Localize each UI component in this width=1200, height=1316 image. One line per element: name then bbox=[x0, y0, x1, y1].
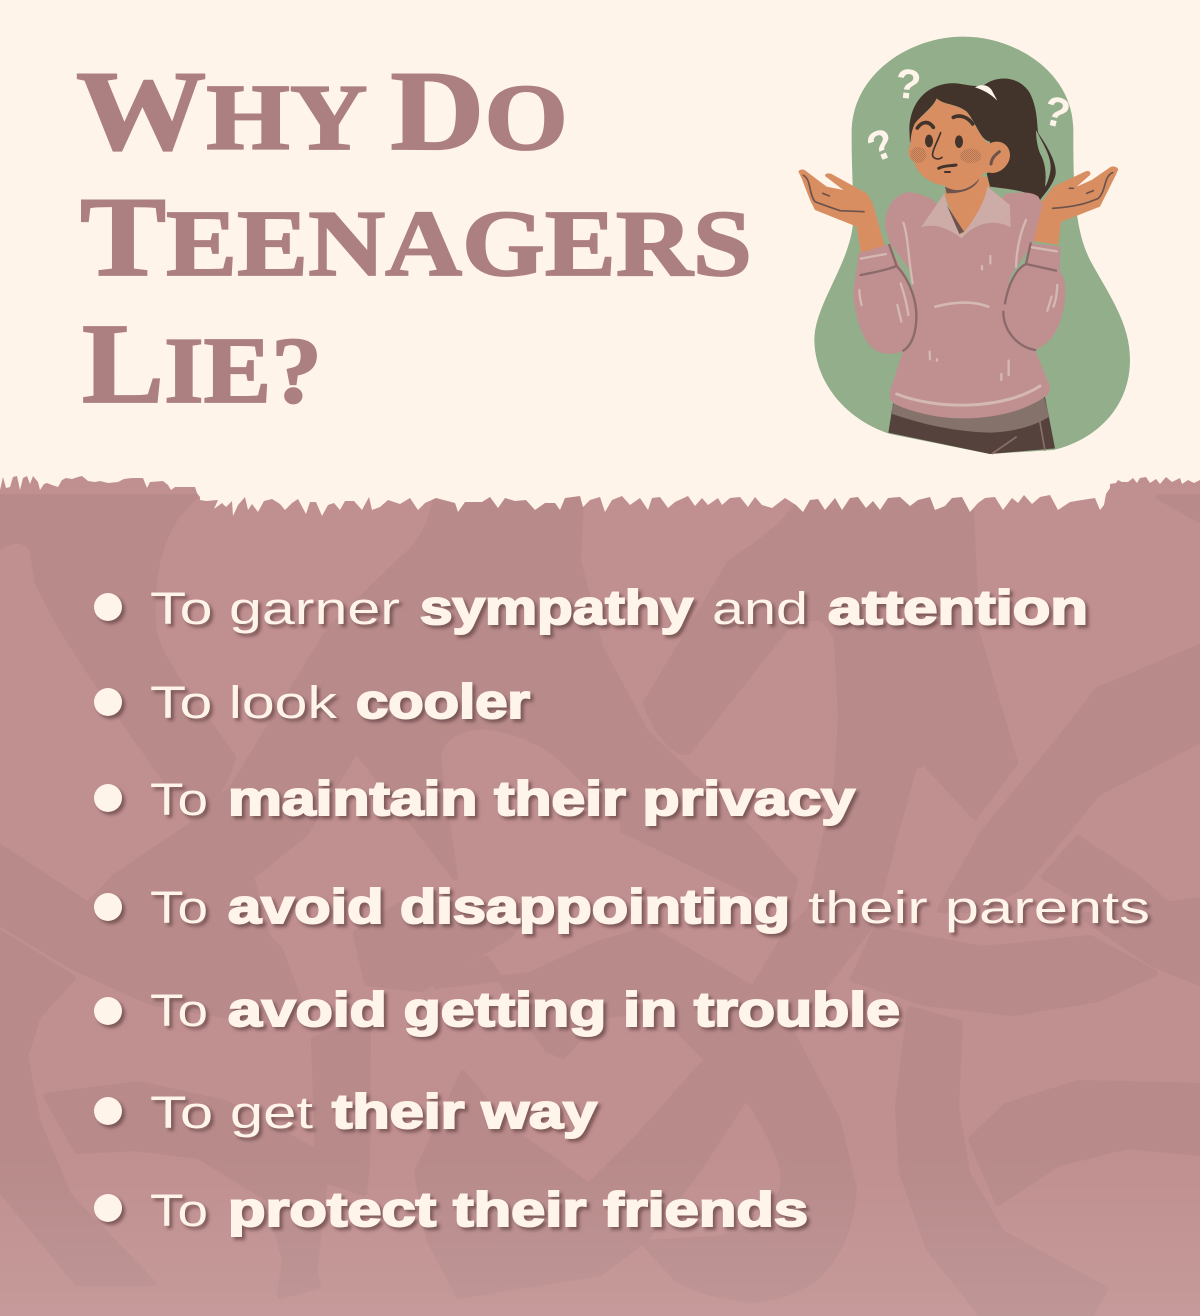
reason: friends bbox=[94, 1184, 808, 1237]
reason: cooler: To look bbox=[150, 677, 338, 728]
panel: reasons background bbox=[0, 470, 1200, 1316]
sweater bbox=[885, 192, 1050, 418]
right sleeve bbox=[1003, 243, 1065, 350]
reason: parents: avoid disappointing bbox=[228, 881, 790, 934]
reason: sympathy and attention: and bbox=[712, 583, 808, 634]
title bbox=[76, 47, 752, 427]
reason: parents: their parents bbox=[808, 882, 1150, 933]
green blob bbox=[814, 37, 1130, 454]
reason: friends: To bbox=[150, 1185, 208, 1236]
cheeks bbox=[910, 147, 926, 163]
neck bbox=[945, 177, 990, 237]
reason: their way: their way bbox=[332, 1086, 597, 1139]
title: WHY DO bbox=[76, 47, 568, 174]
reason: trouble bbox=[94, 984, 900, 1037]
reason: parents: To bbox=[150, 882, 208, 933]
hair bbox=[909, 78, 1056, 200]
question marks: ? bbox=[893, 59, 923, 109]
left sleeve bbox=[853, 244, 917, 354]
reason: trouble: avoid getting in trouble bbox=[228, 984, 900, 1037]
face bbox=[908, 98, 1010, 186]
reason: sympathy and attention bbox=[94, 582, 1088, 635]
question marks: ? bbox=[860, 118, 901, 171]
title: LIE? bbox=[82, 300, 322, 427]
palm lines bbox=[803, 173, 1113, 212]
hair band bbox=[975, 85, 997, 101]
reason: parents bbox=[94, 881, 1150, 934]
reason: sympathy and attention: To garner bbox=[150, 583, 400, 634]
reason: sympathy and attention: attention bbox=[828, 582, 1088, 635]
reason: trouble: To bbox=[150, 985, 208, 1036]
reason: cooler: cooler bbox=[356, 676, 530, 729]
reason: their way bbox=[94, 1086, 597, 1139]
collar bbox=[921, 187, 1011, 238]
question marks: ? bbox=[1039, 86, 1075, 138]
reason: privacy: To bbox=[150, 774, 208, 825]
reasons list bbox=[94, 582, 1150, 1237]
arms bbox=[857, 200, 1062, 253]
question marks bbox=[860, 59, 1075, 171]
eyes bbox=[925, 135, 933, 147]
illustration: confused teenage girl shrugging bbox=[798, 37, 1130, 454]
reason: privacy bbox=[94, 773, 855, 826]
trouser pocket line bbox=[992, 413, 1045, 454]
reason: their way: To get bbox=[150, 1087, 314, 1138]
trousers bbox=[888, 397, 1055, 454]
hands bbox=[798, 170, 872, 227]
reason: cooler bbox=[94, 676, 530, 729]
reason: friends: protect their friends bbox=[228, 1184, 808, 1237]
eyebrows, nose, mouth, ear line bbox=[917, 116, 999, 172]
title: TEENAGERS bbox=[80, 173, 752, 300]
reason: privacy: maintain their privacy bbox=[228, 773, 855, 826]
sweater lines bbox=[861, 243, 1056, 351]
reason: sympathy and attention: sympathy bbox=[420, 582, 693, 635]
torn paper edge bbox=[0, 0, 1200, 516]
